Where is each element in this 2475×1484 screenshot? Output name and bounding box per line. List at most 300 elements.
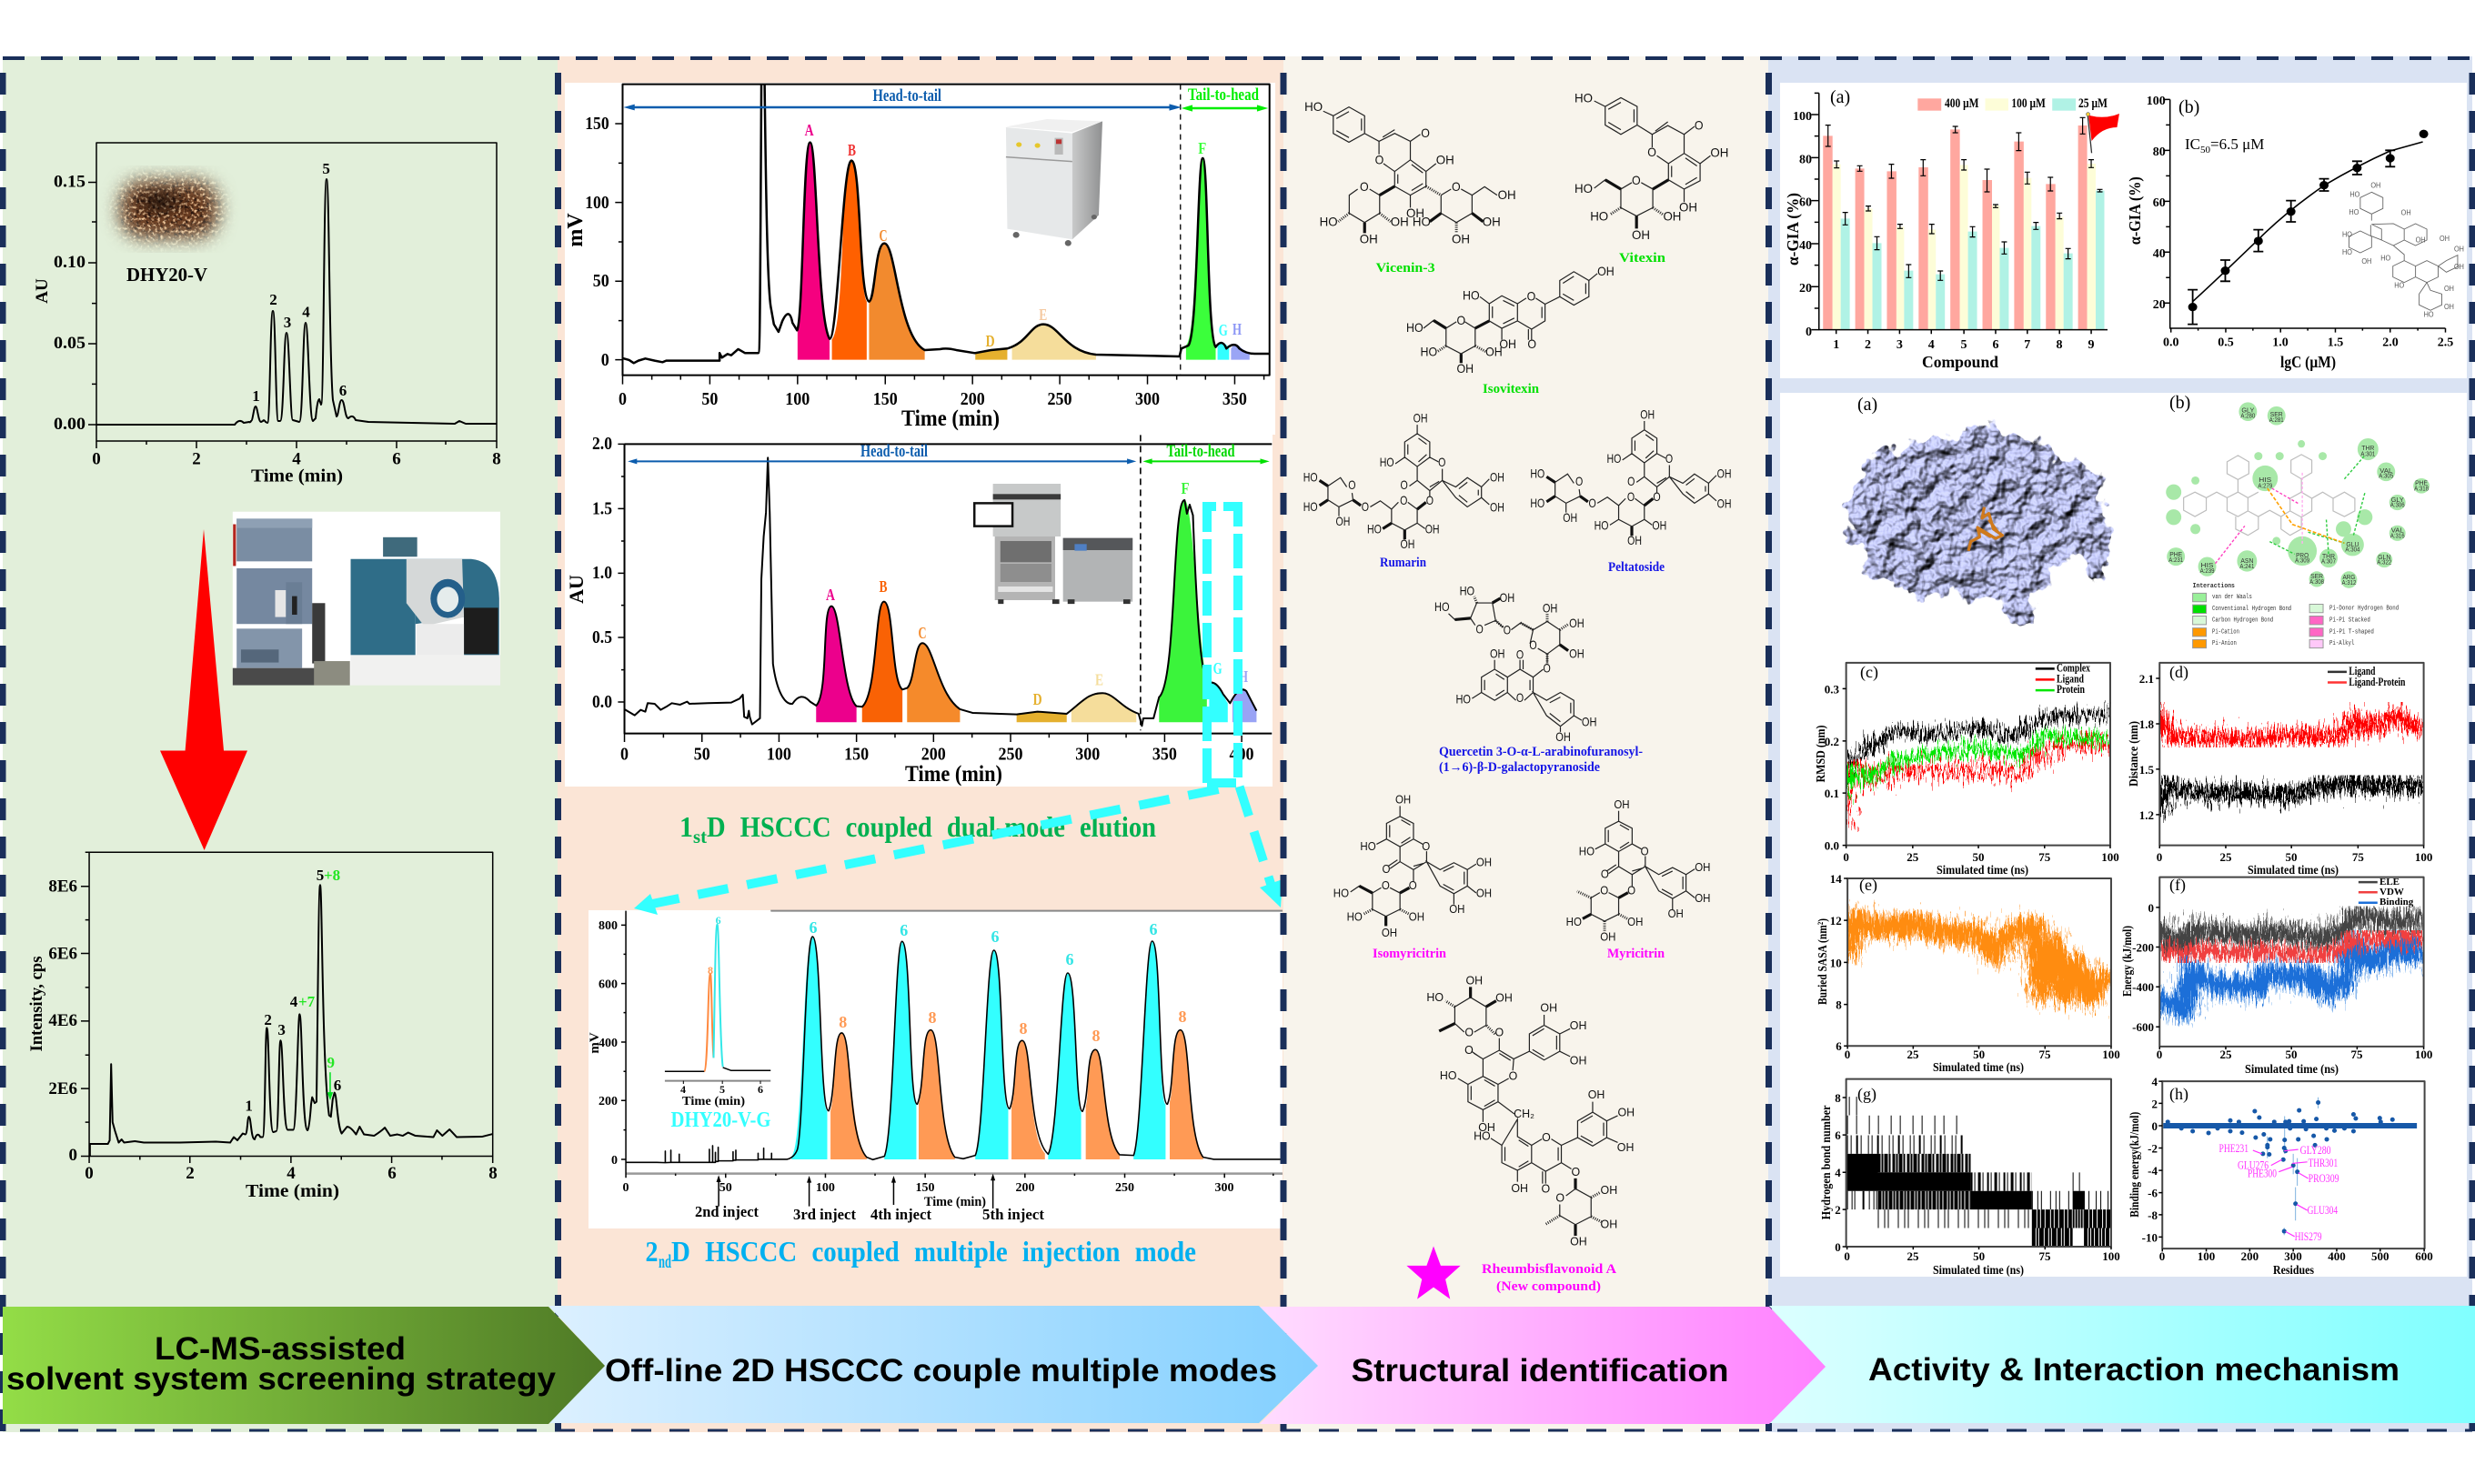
structure: Vicenin-3: O — [1375, 154, 1383, 167]
structure: Rumarin: O — [1426, 494, 1434, 507]
chart: 1st D HSCCC preparative: 250 — [999, 745, 1022, 765]
structure: Peltatoside: OH — [1717, 467, 1732, 481]
trace — [625, 457, 1256, 726]
chart: per-residue binding energy (h): 300 — [2284, 1249, 2302, 1263]
chart: DHY20-V LC-MS chromatogram: Intensity, cps — [27, 957, 46, 1051]
chart: 1st D HSCCC preparative: Time (min) — [905, 762, 1002, 787]
chart: DHY20-V LC-MS chromatogram: 6 — [334, 1077, 341, 1094]
chart: energy (f): Energy (kJ/mol) — [2121, 926, 2135, 997]
figure: 2D interaction diagram (b): A:307 — [2321, 556, 2336, 565]
label: Isovitexin: Isovitexin — [1483, 382, 1540, 396]
chart: DHY20-V UV chromatogram: Time (min) — [251, 466, 343, 486]
label: Quercetin glycoside: Quercetin 3-O-α-L-arabinofuranosyl- — [1439, 745, 1643, 759]
chart: 1st D HSCCC preparative: AU — [565, 575, 588, 604]
structure: Rheumbisflavonoid A: CH₂ — [1514, 1107, 1534, 1120]
chart: distance (d): Distance (nm) — [2128, 721, 2141, 787]
structure: Isomyricitrin: OH — [1395, 793, 1411, 807]
chart: 1st D HSCCC semi-preparative: 100 — [785, 389, 810, 409]
heading: 2nd D HSCCC: D HSCCC coupled multiple injection mode — [671, 1235, 1196, 1268]
chart: energy (f): VDW — [2379, 887, 2404, 897]
structure: compound inset: OH — [2440, 236, 2450, 243]
structure: Isomyricitrin: OH — [1476, 887, 1492, 900]
chart: DHY20-V LC-MS chromatogram: 8E6 — [48, 877, 77, 897]
chart: IC50 dose-response (b): IC — [2185, 135, 2200, 153]
figure: protein surface docking (a) — [1837, 395, 2111, 626]
structure: Quercetin glycoside: OH — [1569, 617, 1585, 631]
figure: 2D interaction diagram (b): A:231 — [2168, 556, 2183, 564]
chart: DHY20-V LC-MS chromatogram: 1 — [245, 1098, 253, 1115]
chart: 1st D HSCCC preparative: 1.5 — [592, 498, 612, 518]
chart: hydrogen bond number (g): 75 — [2039, 1249, 2051, 1263]
chart: per-residue binding energy (h): 4 — [2152, 1075, 2158, 1088]
chart: 1st D HSCCC semi-preparative: 150 — [873, 389, 898, 409]
chart: energy (f) — [2121, 876, 2432, 1077]
structure: Peltatoside — [1530, 408, 1732, 547]
legend: interactions: Conventional Hydrogen Bond — [2212, 605, 2291, 612]
structure: Rheumbisflavonoid A: O — [1464, 1044, 1474, 1057]
fractions — [791, 937, 1203, 1159]
chart: RMSD (c): (c) — [1860, 663, 1878, 682]
legend swatches — [1917, 98, 2076, 111]
structure: Rheumbisflavonoid A: O — [1509, 1069, 1518, 1083]
bars: 100 uM — [1833, 164, 2096, 330]
structure: Peltatoside: OH — [1563, 511, 1577, 525]
structure: Peltatoside: O — [1575, 475, 1583, 488]
chart: buried SASA (e): 0 — [1845, 1048, 1850, 1061]
chart: DHY20-V LC-MS chromatogram: 9 — [327, 1054, 335, 1071]
chart: alpha-GIA bar chart (a): 25 μM — [2078, 96, 2108, 111]
structure: Isomyricitrin: O — [1409, 879, 1417, 892]
fractions — [816, 500, 1256, 722]
chart: alpha-GIA bar chart (a): 5 — [1961, 338, 1967, 352]
structure: Isovitexin: O — [1527, 337, 1536, 351]
chart: per-residue binding energy (h): -8 — [2148, 1208, 2158, 1222]
figure: 2D interaction diagram (b): GLY — [2241, 406, 2255, 414]
heading: 2nd D HSCCC: nd — [659, 1250, 671, 1272]
chart: energy (f): -400 — [2132, 980, 2154, 994]
arrow: to injection chart left — [634, 789, 1219, 915]
structure: Myricitrin: HO — [1579, 845, 1595, 857]
figure: 2D interaction diagram (b): A:322 — [2377, 557, 2391, 566]
chart: DHY20-V LC-MS chromatogram: 2 — [186, 1164, 195, 1183]
chart: 1st D HSCCC preparative: 150 — [844, 745, 869, 765]
chart: 2nd D HSCCC multiple injection: 5 — [719, 1083, 725, 1096]
chart: per-residue binding energy (h): 200 — [2241, 1249, 2259, 1263]
chart: DHY20-V UV chromatogram: 2 — [192, 450, 201, 469]
structure: Isovitexin: HO — [1406, 321, 1424, 336]
structure: Quercetin glycoside: O — [1516, 692, 1524, 706]
figure: 2D interaction diagram (b): SER — [2270, 410, 2283, 418]
structure: Peltatoside: HO — [1606, 452, 1621, 466]
structure: Isomyricitrin: OH — [1449, 902, 1464, 916]
label: Vitexin: Vitexin — [1619, 251, 1666, 266]
structure: compound inset: OH — [2444, 304, 2454, 311]
structure: Isomyricitrin: O — [1382, 879, 1390, 892]
chart: per-residue binding energy (h): 0 — [2152, 1119, 2158, 1133]
chart: IC50 dose-response (b): α-GIA (%) — [2126, 176, 2145, 245]
chart: RMSD (c): 0 — [1843, 850, 1849, 864]
chart: IC50 dose-response (b): 0.5 — [2218, 336, 2234, 350]
chart: DHY20-V UV chromatogram — [33, 143, 501, 486]
structure: Peltatoside: HO — [1595, 519, 1609, 533]
chart: alpha-GIA bar chart (a): 60 — [1799, 196, 1812, 210]
trace — [626, 937, 1283, 1163]
figure: 2D interaction diagram (b): A:281 — [2269, 416, 2284, 424]
chart: buried SASA (e): 14 — [1830, 872, 1842, 886]
chart: hydrogen bond number (g): 25 — [1907, 1249, 1919, 1263]
label: Rheumbisflavonoid A: Rheumbisflavonoid A — [1482, 1262, 1616, 1277]
structure: Quercetin glycoside: OH — [1490, 647, 1505, 661]
chart: distance (d): Ligand-Protein — [2349, 675, 2406, 688]
structure: Rheumbisflavonoid A: OH — [1570, 1054, 1586, 1067]
chart: DHY20-V UV chromatogram: 2 — [269, 291, 277, 308]
chart: DHY20-V LC-MS chromatogram: Time (min) — [246, 1181, 339, 1201]
chart: 1st D HSCCC preparative: 200 — [921, 745, 946, 765]
legend: interactions: Pi-Pi T-shaped — [2329, 628, 2374, 636]
chart: 1st D HSCCC semi-preparative: B — [848, 141, 856, 159]
chart: 2nd D HSCCC multiple injection: 6 — [1066, 950, 1073, 968]
structure: Quercetin glycoside: HO — [1434, 601, 1450, 615]
structure: compound inset: OH — [2454, 246, 2464, 254]
structure: Vicenin-3: OH — [1436, 154, 1454, 167]
chart: distance (d): 100 — [2415, 850, 2432, 864]
chart: 1st D HSCCC semi-preparative: 350 — [1222, 389, 1247, 409]
chart: 2nd D HSCCC multiple injection: 6 — [810, 918, 817, 937]
chart: 2nd D HSCCC multiple injection — [588, 910, 1283, 1228]
structure: Rumarin: OH — [1414, 412, 1427, 426]
chart: distance (d): 75 — [2352, 850, 2364, 864]
structure: Myricitrin: HO — [1566, 915, 1582, 928]
inset: fraction LC — [664, 911, 770, 1107]
chart: energy (f): (f) — [2169, 876, 2186, 895]
structure: Rheumbisflavonoid A: OH — [1570, 1235, 1587, 1248]
chart: hydrogen bond number (g): (g) — [1857, 1085, 1876, 1104]
chart: RMSD (c): 100 — [2101, 850, 2119, 864]
chart: 2nd D HSCCC multiple injection: 6 — [716, 914, 721, 927]
chart: DHY20-V LC-MS chromatogram: 6 — [387, 1164, 397, 1183]
structure: Rumarin: O — [1362, 500, 1369, 515]
chart: 1st D HSCCC semi-preparative: 250 — [1048, 389, 1071, 409]
chart: 1st D HSCCC semi-preparative: 200 — [961, 389, 985, 409]
chart: RMSD (c): Complex — [2057, 660, 2090, 675]
structure: Myricitrin: O — [1641, 845, 1649, 857]
structure: Isovitexin: OH — [1499, 337, 1516, 351]
chart: energy (f): 0 — [2157, 1048, 2162, 1061]
chart: RMSD (c): 25 — [1907, 850, 1919, 864]
structure: Isovitexin: OH — [1597, 265, 1615, 278]
chart: 2nd D HSCCC multiple injection: 600 — [599, 978, 618, 992]
legend: interactions: Interactions — [2193, 583, 2235, 590]
structure: Rumarin: OH — [1336, 515, 1350, 528]
banner: Activity and Interaction mechanism — [1769, 1306, 2475, 1423]
chart: 2nd D HSCCC multiple injection: 3rd inject — [793, 1206, 856, 1223]
heading: 2nd D HSCCC: 2 — [646, 1235, 659, 1268]
chart: 2nd D HSCCC multiple injection: Time (min) — [924, 1195, 986, 1209]
chart: distance (d): 50 — [2285, 850, 2298, 864]
trace — [622, 85, 1270, 363]
chart: DHY20-V UV chromatogram: 4 — [292, 450, 301, 469]
chart: 2nd D HSCCC multiple injection: 8 — [928, 1008, 937, 1027]
chart: 1st D HSCCC preparative — [565, 434, 1273, 787]
trace — [90, 885, 493, 1156]
chart: 2nd D HSCCC multiple injection: 250 — [1115, 1181, 1134, 1195]
chart: alpha-GIA bar chart (a): 20 — [1799, 282, 1812, 296]
residues — [2166, 402, 2430, 588]
cyan dashed selection box and arrows — [634, 506, 1283, 915]
arrow: head-to-tail — [628, 458, 1136, 464]
chart: per-residue binding energy (h): GLU276 — [2238, 1158, 2269, 1171]
chart: hydrogen bond number (g): 8 — [1835, 1091, 1841, 1105]
figure: 2D interaction diagram (b): GLN — [2378, 553, 2390, 560]
chart: IC50 dose-response (b): lgC (μM) — [2280, 353, 2336, 372]
hydrogen bonds — [2269, 456, 2365, 554]
structure: compound inset: HO — [2380, 255, 2390, 263]
chart: 1st D HSCCC semi-preparative: 0 — [619, 389, 627, 409]
legend: interactions: Pi-Pi Stacked — [2329, 617, 2370, 624]
structure: compound inset — [2342, 182, 2464, 319]
chart: DHY20-V LC-MS chromatogram — [27, 852, 498, 1201]
structure: Vicenin-3: O — [1452, 180, 1461, 195]
figure: 2D interaction diagram (b): ARG — [2342, 573, 2355, 581]
chart: buried SASA (e): 100 — [2102, 1048, 2120, 1061]
chart: 2nd D HSCCC multiple injection: 6 — [900, 921, 908, 939]
chart: 1st D HSCCC semi-preparative: 150 — [585, 114, 609, 134]
structure: Rheumbisflavonoid A: O — [1555, 1191, 1564, 1205]
structure: Vicenin-3: O — [1360, 180, 1369, 195]
structure: Rheumbisflavonoid A: OH — [1570, 1018, 1586, 1032]
chart: buried SASA (e): 8 — [1836, 998, 1842, 1012]
structure: Isomyricitrin: OH — [1476, 856, 1492, 869]
chart: energy (f): 25 — [2219, 1048, 2232, 1061]
figure: 2D interaction diagram (b): SER — [2310, 572, 2323, 580]
structure: Rheumbisflavonoid A: HO — [1474, 1129, 1491, 1143]
structure: Quercetin glycoside: O — [1544, 662, 1551, 676]
structure: Isomyricitrin: HO — [1360, 839, 1376, 853]
chart: buried SASA (e): 50 — [1973, 1048, 1985, 1061]
structure: Vicenin-3: OH — [1452, 233, 1470, 246]
chart: 1st D HSCCC preparative: 0.0 — [592, 692, 612, 712]
structure: Peltatoside: HO — [1530, 467, 1544, 481]
chart: 2nd D HSCCC multiple injection: 4th inject — [870, 1206, 931, 1223]
chart: alpha-GIA bar chart (a): 8 — [2056, 338, 2063, 352]
legend: interactions: Carbon Hydrogen Bond — [2212, 617, 2273, 624]
chart: alpha-GIA bar chart (a): 3 — [1896, 338, 1903, 352]
chart: 2nd D HSCCC multiple injection: 8 — [708, 964, 713, 977]
chart: per-residue binding energy (h): Binding energy(kJ/mol) — [2128, 1111, 2142, 1218]
structure: Peltatoside: O — [1627, 475, 1635, 488]
chart: DHY20-V LC-MS chromatogram: 6E6 — [48, 944, 77, 964]
structure: Quercetin glycoside: OH — [1582, 716, 1596, 729]
structure: Rheumbisflavonoid A: O — [1572, 1166, 1581, 1178]
structure: Vicenin-3: HO — [1413, 216, 1431, 229]
structure: Peltatoside: OH — [1627, 534, 1642, 547]
chart: DHY20-V UV chromatogram: 6 — [392, 450, 401, 469]
structure: Vitexin — [1575, 92, 1728, 243]
chart: 2nd D HSCCC multiple injection: 0 — [611, 1154, 618, 1168]
figure: 2D interaction diagram (b): HIS — [2259, 476, 2271, 484]
structure: Myricitrin: O — [1600, 884, 1609, 897]
structure: Vicenin-3 — [1304, 101, 1516, 246]
chart: distance (d): 25 — [2219, 850, 2232, 864]
figure: 2D interaction diagram (b): A:312 — [2341, 578, 2356, 586]
structure: Rheumbisflavonoid A — [1426, 974, 1635, 1248]
structure: Rumarin: HO — [1380, 456, 1394, 470]
structure: Rheumbisflavonoid A: O — [1542, 1130, 1551, 1144]
chart: 2nd D HSCCC multiple injection: 6 — [1150, 920, 1157, 938]
chart: per-residue binding energy (h): -10 — [2142, 1230, 2158, 1244]
structure: Rheumbisflavonoid A: OH — [1540, 1001, 1557, 1015]
structure: compound inset: OH — [2444, 286, 2454, 293]
banner: Structural identification — [1260, 1307, 1826, 1424]
figure: 2D interaction diagram (b): PRO — [2296, 551, 2309, 558]
figure: 2D interaction diagram (b): (b) — [2169, 393, 2190, 413]
label: Myricitrin: Myricitrin — [1607, 947, 1665, 961]
chart: per-residue binding energy (h): GLY280 — [2300, 1143, 2331, 1157]
structure: Vitexin: O — [1695, 119, 1704, 133]
fractions — [798, 143, 1250, 360]
chart: 2nd D HSCCC multiple injection: 8 — [1179, 1008, 1186, 1026]
structure: Peltatoside: OH — [1640, 408, 1655, 422]
chart: alpha-GIA bar chart (a): 6 — [1992, 338, 1999, 352]
label: Vicenin-3: Vicenin-3 — [1376, 261, 1435, 276]
chart: IC50 dose-response (b): 50 — [2200, 145, 2210, 155]
chart: alpha-GIA bar chart (a): 4 — [1928, 338, 1935, 352]
chart: 2nd D HSCCC multiple injection: DHY20-V-G — [671, 1108, 771, 1132]
figure: 2D interaction diagram (b): A:280 — [2240, 411, 2255, 419]
icon: red flag — [2087, 113, 2119, 153]
chart: IC50 dose-response (b): 2.5 — [2438, 336, 2453, 350]
structure: Rheumbisflavonoid A: O — [1464, 1026, 1474, 1038]
chart: per-residue binding energy (h): 2 — [2152, 1097, 2158, 1110]
chart: 1st D HSCCC preparative: 2.0 — [592, 434, 612, 454]
structure: Isomyricitrin: HO — [1333, 887, 1349, 900]
chart: RMSD (c): 0.3 — [1825, 682, 1839, 697]
chart: DHY20-V UV chromatogram: 6 — [339, 382, 347, 399]
panel: off-line 2D HSCCC — [558, 56, 1283, 1432]
structure: Vitexin: HO — [1575, 92, 1593, 105]
structure: compound inset: HO — [2394, 282, 2404, 290]
chart: alpha-GIA bar chart (a): 9 — [2088, 338, 2094, 352]
structure: Rheumbisflavonoid A: OH — [1601, 1184, 1617, 1197]
structure: compound inset: HO — [2342, 249, 2352, 256]
chart: buried SASA (e): 75 — [2039, 1048, 2051, 1061]
structure: Rheumbisflavonoid A: HO — [1426, 990, 1444, 1004]
protein surface — [1837, 421, 2111, 626]
chart: alpha-GIA bar chart (a): 40 — [1799, 239, 1812, 253]
structure: Isomyricitrin — [1333, 793, 1492, 939]
icon: star — [1406, 1246, 1461, 1299]
structure: Myricitrin: OH — [1600, 930, 1615, 944]
chart: DHY20-V UV chromatogram: 3 — [284, 314, 291, 331]
structure: Myricitrin — [1566, 797, 1710, 944]
chart: RMSD (c): 0.0 — [1825, 839, 1839, 853]
chart: buried SASA (e): 10 — [1830, 956, 1842, 969]
structure: Isovitexin: OH — [1456, 362, 1474, 376]
chart: DHY20-V UV chromatogram: 4 — [302, 304, 310, 320]
chart: energy (f): -600 — [2132, 1020, 2154, 1034]
figure: 2D interaction diagram (b): A:301 — [2360, 449, 2375, 457]
chart: energy (f): -200 — [2132, 940, 2154, 955]
chart: per-residue binding energy (h): PHE300 — [2248, 1166, 2277, 1179]
structure: Rumarin: OH — [1490, 471, 1504, 485]
chart: IC50 dose-response (b) — [2126, 95, 2464, 372]
photo: tea sample — [120, 180, 218, 238]
chart: 1st D HSCCC preparative: B — [879, 577, 888, 596]
chart: 1st D HSCCC semi-preparative — [564, 83, 1275, 435]
chart: 1st D HSCCC semi-preparative: 50 — [593, 271, 609, 291]
chart: buried SASA (e): (e) — [1859, 876, 1877, 895]
structure: Myricitrin: OH — [1668, 907, 1684, 920]
chart: alpha-GIA bar chart (a): 7 — [2024, 338, 2030, 352]
chart: distance (d): 2.1 — [2139, 672, 2154, 686]
chart: 2nd D HSCCC multiple injection: Time (min) — [682, 1095, 745, 1108]
figure: 2D interaction diagram (b): A:306 — [2390, 500, 2405, 508]
structure: Vicenin-3: OH — [1391, 216, 1409, 229]
structure: Rumarin: O — [1400, 478, 1408, 493]
chart: 2nd D HSCCC multiple injection: 8 — [839, 1013, 847, 1031]
ligand — [1968, 507, 2002, 551]
chart: DHY20-V LC-MS chromatogram: 0 — [69, 1146, 77, 1165]
structure: Isomyricitrin: O — [1422, 839, 1431, 853]
chart: energy (f): 75 — [2350, 1048, 2363, 1061]
chart: 1st D HSCCC preparative: 300 — [1075, 745, 1100, 765]
structure: Rheumbisflavonoid A: OH — [1617, 1140, 1634, 1154]
chart: 1st D HSCCC semi-preparative: 50 — [701, 389, 718, 409]
structure: Vitexin: OH — [1710, 146, 1728, 160]
structure: Vitexin: O — [1632, 174, 1641, 187]
chart: buried SASA (e): Simulated time (ns) — [1933, 1061, 2024, 1075]
chart: buried SASA (e) — [1816, 872, 2120, 1075]
chart: 2nd D HSCCC multiple injection: 200 — [599, 1095, 618, 1108]
legend: interactions: Pi-Donor Hydrogen Bond — [2329, 605, 2399, 612]
structure: Vitexin: HO — [1575, 182, 1593, 196]
chart: 1st D HSCCC semi-preparative: G — [1219, 321, 1228, 339]
structure: Myricitrin: OH — [1695, 891, 1710, 905]
chart: DHY20-V LC-MS chromatogram: 5 — [317, 867, 324, 884]
chart: per-residue binding energy (h): (h) — [2169, 1085, 2188, 1104]
structure: Quercetin glycoside: HO — [1455, 693, 1471, 707]
structure: Myricitrin: O — [1601, 867, 1609, 881]
structure: Isovitexin — [1406, 265, 1615, 376]
chart: hydrogen bond number (g): 4 — [1835, 1166, 1841, 1179]
chart: DHY20-V LC-MS chromatogram: 3 — [277, 1021, 286, 1038]
structure: Quercetin glycoside: O — [1504, 624, 1511, 637]
legend: interactions: Pi-Cation — [2212, 628, 2239, 636]
label: Peltatoside: Peltatoside — [1608, 560, 1665, 575]
structure: Vicenin-3: OH — [1360, 233, 1378, 246]
chart: hydrogen bond number (g) — [1820, 1079, 2120, 1278]
panel: structural identification — [1283, 56, 1768, 1432]
chart: 2nd D HSCCC multiple injection: 800 — [599, 919, 618, 933]
structure: Isomyricitrin: HO — [1347, 910, 1363, 924]
structure: Vicenin-3: HO — [1304, 101, 1323, 115]
chart: hydrogen bond number (g): 50 — [1973, 1249, 1985, 1263]
chart: DHY20-V UV chromatogram: 0.00 — [54, 415, 86, 434]
chart: distance (d) — [2128, 663, 2432, 877]
figure: 2D interaction diagram (b): GLU — [2346, 540, 2359, 547]
chart: IC50 dose-response (b): 100 — [2147, 95, 2166, 108]
structure: Vicenin-3: OH — [1498, 188, 1516, 203]
chart: RMSD (c) — [1815, 660, 2119, 877]
chart: 1st D HSCCC semi-preparative: C — [879, 226, 888, 245]
structure: Rheumbisflavonoid A: OH — [1511, 1181, 1528, 1195]
chart: 1st D HSCCC preparative: C — [919, 624, 926, 642]
chart: 2nd D HSCCC multiple injection: 6 — [991, 928, 999, 946]
structure: Rheumbisflavonoid A: OH — [1618, 1106, 1635, 1119]
chart: energy (f): Simulated time (ns) — [2245, 1063, 2339, 1077]
chart: RMSD (c): Protein — [2057, 682, 2086, 696]
chart: distance (d): Simulated time (ns) — [2248, 864, 2339, 877]
